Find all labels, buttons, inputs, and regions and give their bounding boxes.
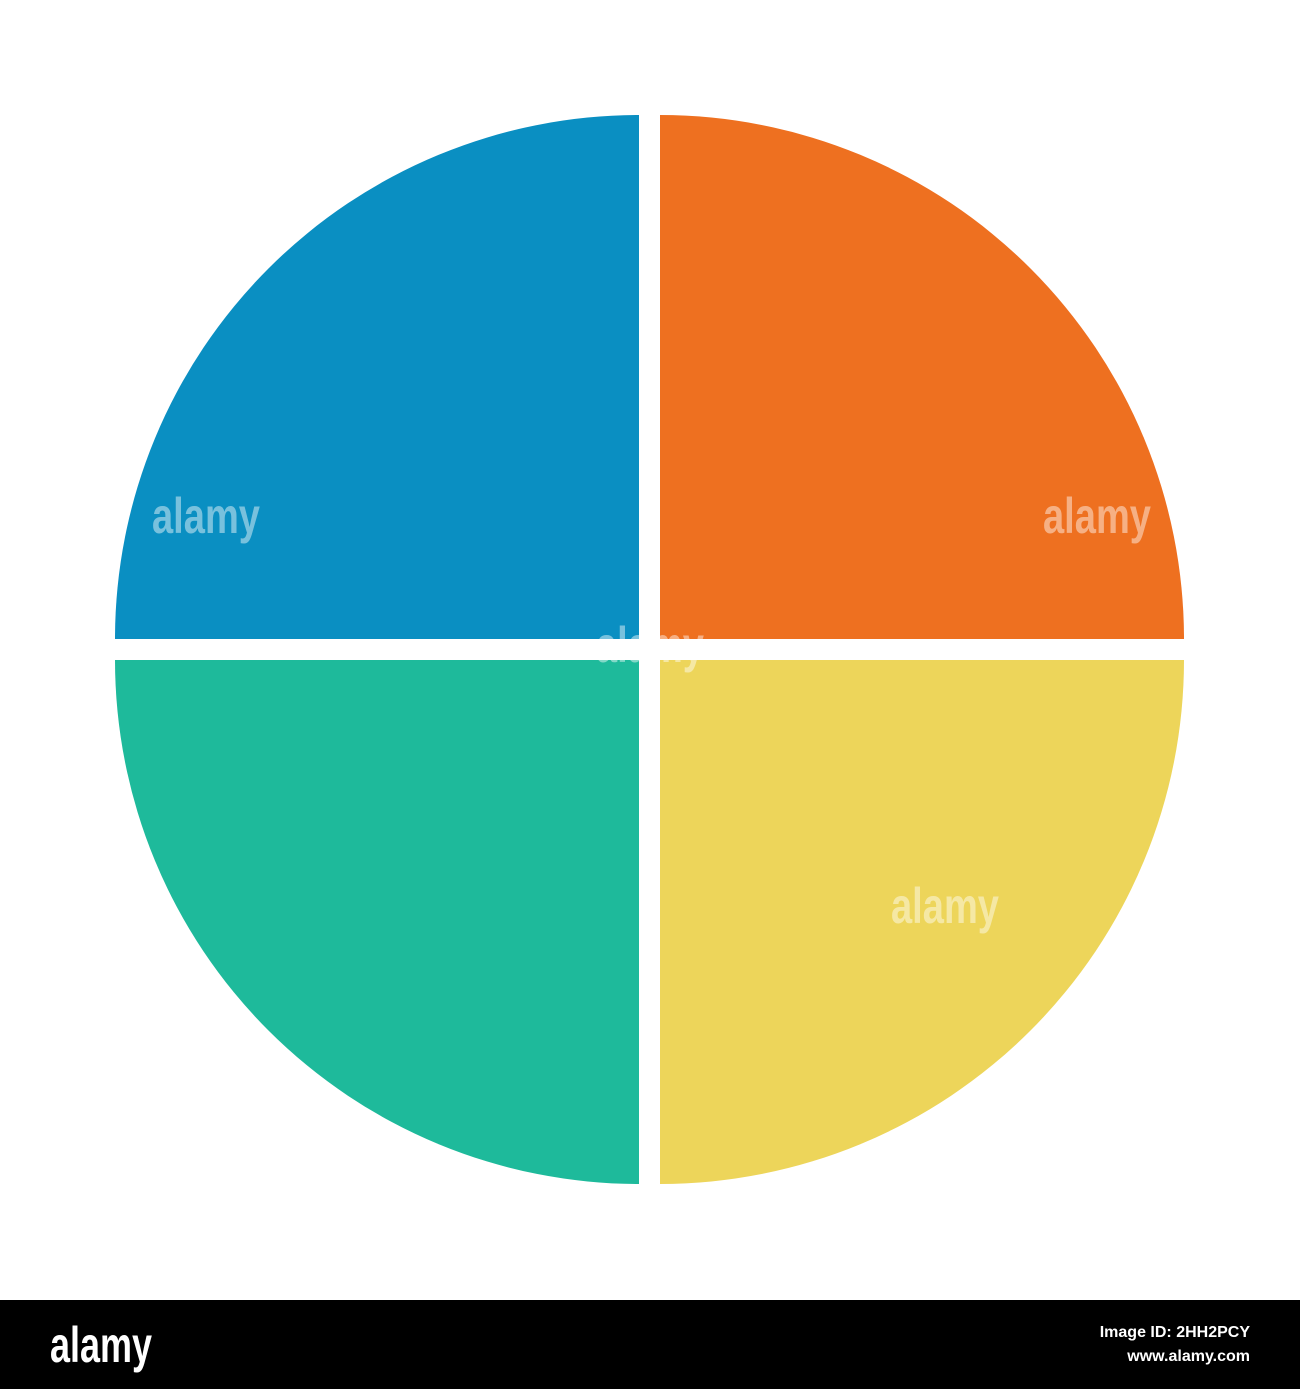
quadrant: blue top-left: [115, 115, 639, 639]
footer logo: alamy: [50, 1317, 152, 1373]
watermarks: alamy: [891, 878, 999, 934]
quadrant: teal bottom-left: [115, 660, 639, 1184]
footer bar: [0, 1300, 1300, 1389]
quadrant: orange top-right: [660, 115, 1184, 639]
footer image id: Image ID: 2HH2PCY: [1100, 1324, 1250, 1341]
watermarks: [152, 488, 1151, 934]
quadrant: yellow bottom-right: [660, 660, 1184, 1184]
footer url: www.alamy.com: [1126, 1348, 1250, 1365]
watermarks: alamy: [152, 488, 260, 544]
watermarks: alamy: [1043, 488, 1151, 544]
watermarks: alamy: [596, 617, 704, 673]
